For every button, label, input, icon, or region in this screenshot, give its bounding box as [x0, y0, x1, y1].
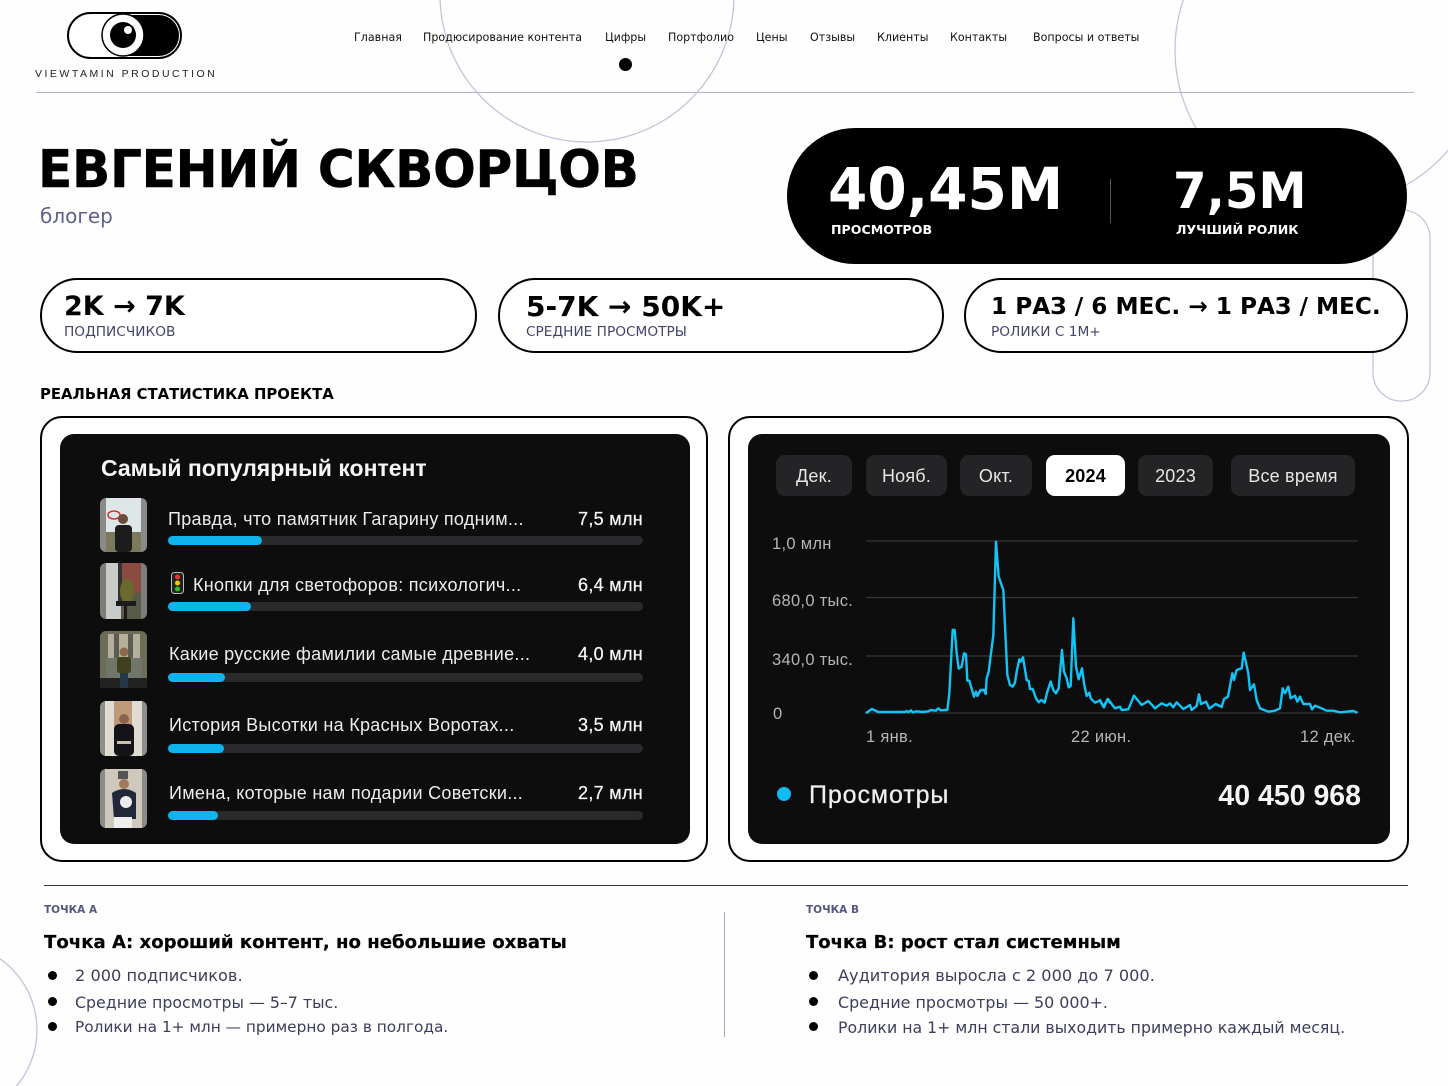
icon: traffic light	[171, 572, 184, 594]
navigation menu: Продюсирование контента	[423, 31, 582, 44]
navigation menu: Портфолио	[668, 31, 734, 44]
period tabs	[776, 455, 1355, 496]
line chart: 1 янв.	[866, 728, 913, 746]
panel: point A: ТОЧКА А	[44, 904, 97, 916]
row 3: 4,0 млн	[578, 644, 643, 664]
panel: point A	[44, 904, 567, 1036]
row 2	[100, 563, 643, 619]
panel: views chart	[728, 416, 1409, 862]
line chart: 680,0 тыс.	[772, 592, 853, 610]
row 4	[100, 701, 643, 756]
navigation menu: Главная	[354, 31, 402, 44]
period tabs: 2023	[1155, 466, 1196, 486]
panel: point A: Точка А: хороший контент, но небольшие охваты	[44, 932, 567, 953]
chart legend: 40 450 968	[1218, 780, 1361, 812]
period tabs: Нояб.	[882, 466, 931, 486]
stats pill: 40,45M	[828, 155, 1063, 223]
panel: point B	[806, 904, 1345, 1037]
metric pill: 1M+ videos: РОЛИКИ С 1М+	[991, 324, 1101, 340]
navigation menu: Вопросы и ответы	[1033, 31, 1139, 44]
navigation menu: Контакты	[950, 31, 1007, 44]
panel: point B: Аудитория выросла с 2 000 до 7 000.	[838, 966, 1155, 985]
metric pill: average views: 5-7K → 50K+	[526, 290, 725, 323]
period tabs: Дек.	[796, 466, 832, 486]
line chart	[772, 535, 1358, 746]
row 4: 3,5 млн	[578, 715, 643, 735]
stats pill: ЛУЧШИЙ РОЛИК	[1176, 222, 1299, 237]
row 2: Кнопки для светофоров: психологич...	[193, 575, 521, 595]
line chart: 340,0 тыс.	[772, 651, 853, 669]
line chart: 22 июн.	[1071, 728, 1131, 746]
metric pill: subscribers: 2K → 7K	[64, 291, 185, 322]
row 1	[100, 498, 643, 552]
line chart: 12 дек.	[1300, 728, 1356, 746]
logo	[35, 12, 217, 80]
row 5: Имена, которые нам подарии Советски...	[169, 783, 523, 803]
panel: point A: Средние просмотры — 5–7 тыс.	[75, 993, 338, 1012]
line chart: 1,0 млн	[772, 535, 832, 553]
metric pill: subscribers	[40, 278, 477, 353]
period tabs: Все время	[1248, 466, 1338, 486]
section heading: РЕАЛЬНАЯ СТАТИСТИКА ПРОЕКТА	[40, 385, 334, 403]
panel: point B: Ролики на 1+ млн стали выходить примерно каждый месяц.	[838, 1018, 1345, 1037]
navigation menu: Цифры	[605, 31, 646, 44]
panel: point A: 2 000 подписчиков.	[75, 966, 243, 985]
navigation menu: Отзывы	[810, 31, 855, 44]
row 4: История Высотки на Красных Воротах...	[169, 715, 515, 735]
row 3: Какие русские фамилии самые древние...	[169, 644, 530, 664]
period tabs: Окт.	[979, 466, 1013, 486]
panel: popular content	[40, 416, 708, 862]
panel: point B: Точка В: рост стал системным	[806, 932, 1121, 953]
line chart: 0	[773, 705, 782, 723]
navigation menu: Клиенты	[877, 31, 928, 44]
chart legend	[777, 780, 1361, 812]
navigation menu: Цены	[756, 31, 787, 44]
metric pill: average views: СРЕДНИЕ ПРОСМОТРЫ	[526, 324, 687, 340]
row 1: 7,5 млн	[578, 509, 643, 529]
subtitle: блогер	[40, 204, 113, 228]
panel: point B: ТОЧКА В	[806, 904, 859, 916]
stats pill	[787, 128, 1407, 264]
logo: VIEWTAMIN PRODUCTION	[35, 68, 217, 80]
row 5: 2,7 млн	[578, 783, 643, 803]
row 1: Правда, что памятник Гагарину подним...	[168, 509, 524, 529]
chart legend: Просмотры	[809, 781, 949, 809]
panel: point A: Ролики на 1+ млн — примерно раз в полгода.	[75, 1018, 448, 1036]
navigation menu	[354, 31, 1139, 71]
metric pill: average views	[498, 278, 944, 353]
stats pill: 7,5M	[1173, 162, 1307, 220]
row 3	[100, 631, 643, 688]
metric pill: 1M+ videos: 1 РАЗ / 6 МЕС. → 1 РАЗ / МЕС.	[991, 293, 1381, 320]
title: ЕВГЕНИЙ СКВОРЦОВ	[38, 140, 639, 200]
stats pill: ПРОСМОТРОВ	[831, 222, 932, 237]
row 5	[100, 769, 643, 828]
metric pill: 1M+ videos	[964, 278, 1408, 353]
row 2: 6,4 млн	[578, 575, 643, 595]
panel: point B: Средние просмотры — 50 000+.	[838, 993, 1108, 1012]
period tabs: 2024	[1065, 466, 1106, 486]
metric pill: subscribers: ПОДПИСЧИКОВ	[64, 324, 175, 340]
popular content heading: Самый популярный контент	[101, 455, 427, 481]
